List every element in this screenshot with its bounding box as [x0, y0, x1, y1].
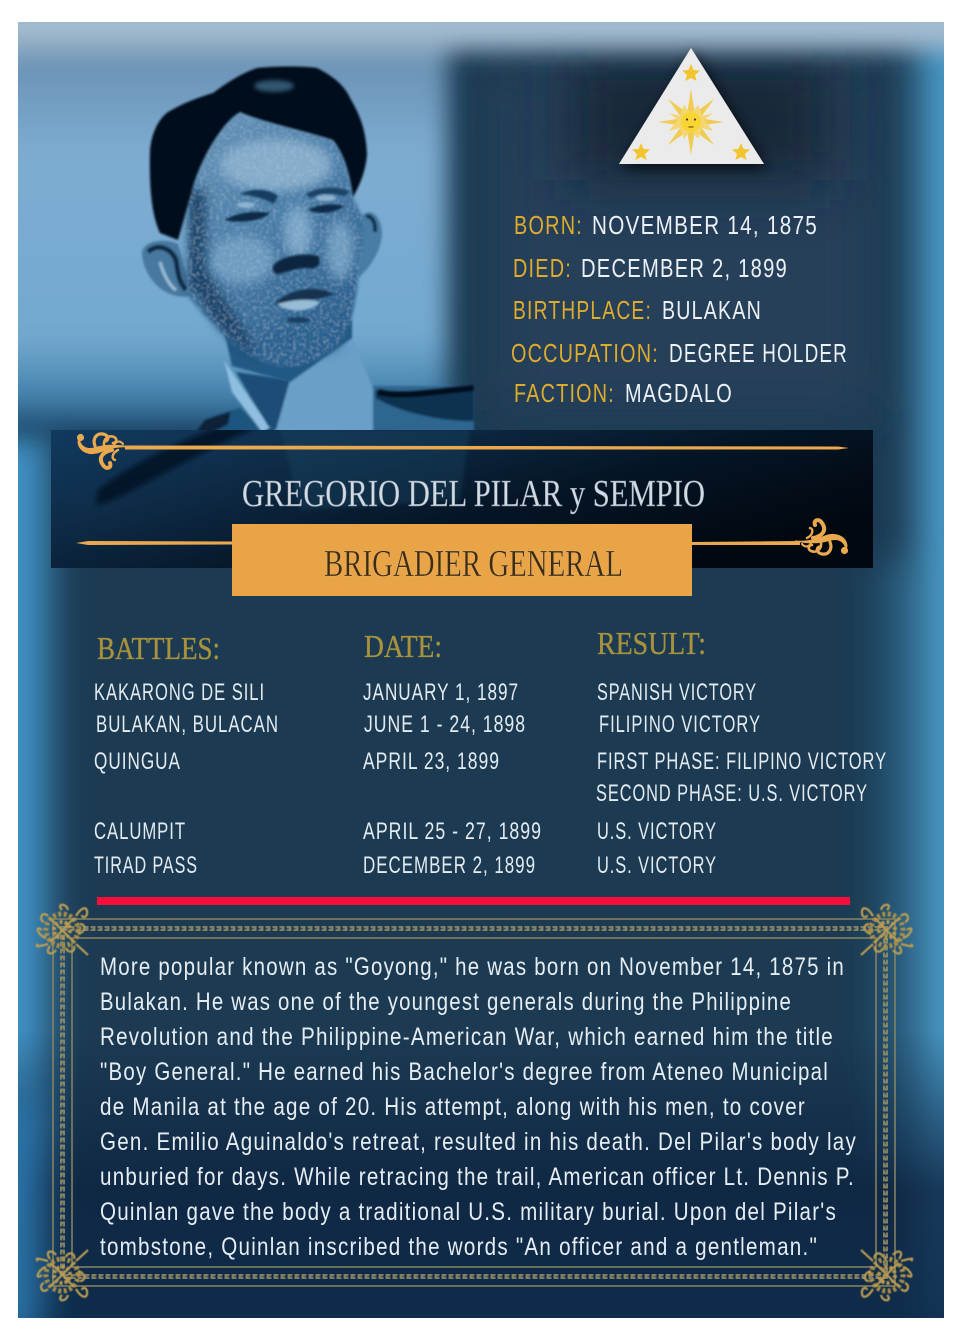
- top light strip: [18, 22, 944, 68]
- biography paragraph: Bulakan. He was one of the youngest generals during the Philippine: [100, 988, 792, 1016]
- jaw shadow: [192, 270, 260, 358]
- battles column: BULAKAN, BULACAN: [96, 711, 279, 738]
- occupation: [511, 338, 848, 368]
- coat and collar: [216, 358, 475, 430]
- rank text: BRIGADIER GENERAL: [324, 543, 623, 585]
- result column: SPANISH VICTORY: [597, 679, 757, 706]
- battles column: TIRAD PASS: [94, 852, 198, 879]
- white triangle: [619, 48, 764, 164]
- left ear: [142, 241, 193, 297]
- top star: [682, 64, 700, 81]
- biography paragraph: tombstone, Quinlan inscribed the words "An officer and a gentleman.": [100, 1233, 818, 1261]
- result column: [596, 625, 887, 879]
- corner ornament top right: [861, 905, 912, 955]
- result column: U.S. VICTORY: [597, 852, 717, 879]
- occupation: OCCUPATION:: [511, 338, 659, 368]
- date column: DECEMBER 2, 1899: [363, 852, 536, 879]
- died: DIED:: [513, 253, 572, 283]
- corner ornament bottom right: [861, 1250, 912, 1300]
- nose bridge light: [284, 206, 312, 258]
- date column: DATE:: [364, 628, 442, 664]
- date column: APRIL 25 - 27, 1899: [363, 818, 542, 845]
- lower gold rule left: [76, 541, 232, 545]
- occupation: DEGREE HOLDER: [669, 338, 848, 368]
- nose: [273, 254, 320, 274]
- biography paragraph: [100, 953, 857, 1261]
- result column: RESULT:: [597, 625, 706, 661]
- faction: FACTION:: [514, 378, 615, 408]
- eyes and brows: [224, 188, 350, 222]
- faded shoulder behind banner: [96, 425, 470, 510]
- lower gold rule right with flourish: [692, 520, 848, 554]
- born: NOVEMBER 14, 1875: [592, 210, 818, 240]
- cheek light: [210, 236, 274, 284]
- faction: [514, 378, 733, 408]
- born: BORN:: [514, 210, 583, 240]
- name: GREGORIO DEL PILAR y SEMPIO: [242, 473, 705, 515]
- date column: JUNE 1 - 24, 1898: [364, 711, 526, 738]
- hair: [150, 66, 367, 240]
- epaulettes: [196, 385, 474, 432]
- left star: [632, 143, 650, 160]
- corner ornament bottom left: [37, 1250, 88, 1300]
- name banner: [51, 425, 873, 596]
- table of battles: [94, 625, 887, 879]
- battles column: CALUMPIT: [94, 818, 186, 845]
- photo backdrop: [0, 30, 448, 440]
- date column: JANUARY 1, 1897: [363, 679, 519, 706]
- hair highlight: [254, 80, 294, 92]
- sun: [658, 89, 724, 155]
- right star: [732, 143, 750, 160]
- neck: [225, 320, 352, 382]
- battles column: KAKARONG DE SILI: [94, 679, 265, 706]
- birthplace: BIRTHPLACE:: [513, 295, 652, 325]
- birthplace: BULAKAN: [662, 295, 762, 325]
- right ear: [358, 212, 382, 278]
- battles column: [94, 630, 279, 879]
- ornamental gold frame: [37, 905, 912, 1300]
- faction: MAGDALO: [625, 378, 733, 408]
- top gold rule with flourish: [77, 434, 849, 468]
- corner ornament top left: [37, 905, 88, 955]
- portrait photo of Gregorio del Pilar: [0, 0, 956, 440]
- right cheek light: [326, 220, 354, 280]
- battles column: BATTLES:: [97, 630, 220, 666]
- face: [188, 112, 364, 367]
- forehead light: [220, 139, 332, 191]
- date column: [363, 628, 542, 879]
- side shadow: [188, 190, 206, 290]
- result column: U.S. VICTORY: [597, 818, 717, 845]
- born: [514, 210, 818, 240]
- biography paragraph: de Manila at the age of 20. His attempt, along with his men, to cover: [100, 1093, 806, 1121]
- mouth: [276, 289, 334, 323]
- died: [513, 253, 788, 283]
- battles column: QUINGUA: [94, 748, 181, 775]
- biography facts: [511, 210, 848, 408]
- rank box: [232, 524, 692, 596]
- died: DECEMBER 2, 1899: [581, 253, 788, 283]
- chin shadow: [258, 329, 342, 355]
- red divider: [97, 897, 850, 905]
- date column: APRIL 23, 1899: [363, 748, 500, 775]
- star emblem: triangle with sun and three stars: [619, 48, 764, 164]
- result column: FILIPINO VICTORY: [599, 711, 761, 738]
